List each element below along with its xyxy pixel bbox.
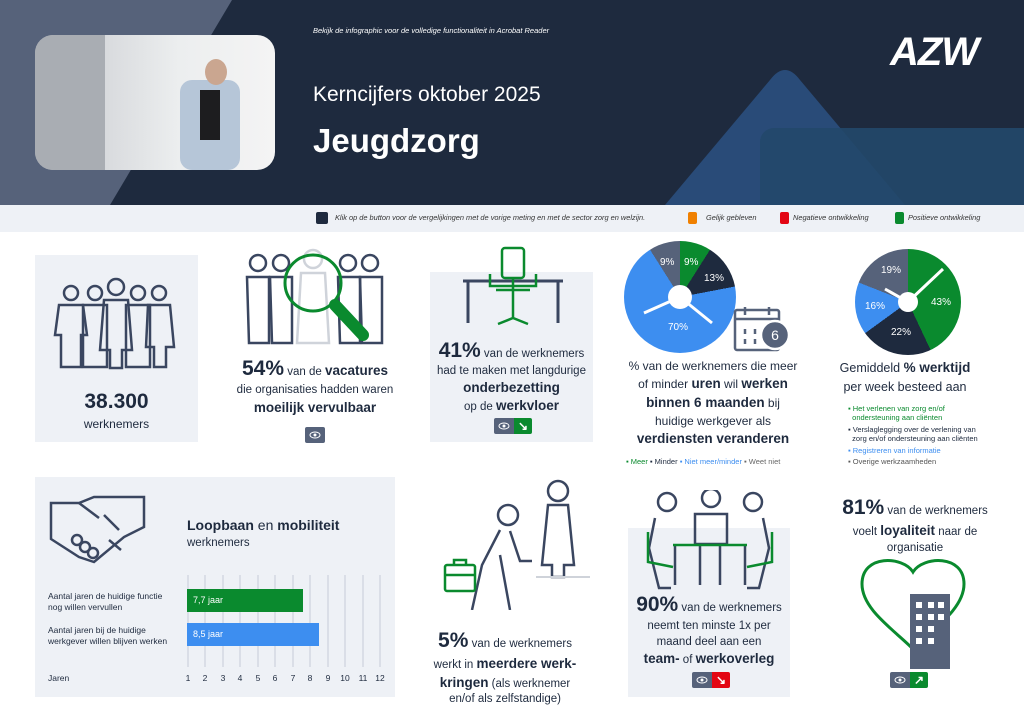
panel: onderbezetting: [430, 272, 593, 442]
text: 90%: maand deel aan een: [657, 636, 761, 648]
legend bar: Negatieve ontwikkeling: [793, 213, 869, 222]
bar chart: 9: [326, 673, 330, 683]
icon: calendar 6: 6: [771, 327, 779, 343]
icon: meeting: [646, 490, 774, 590]
bar chart: werkgever willen blijven werken: [48, 636, 167, 646]
text: 90%: team- of werkoverleg: [644, 651, 774, 666]
logo: AZW: [890, 30, 978, 74]
stat: 38.300: [84, 390, 149, 431]
text: 5%: werkt in meerdere werk-: [434, 656, 576, 671]
legend bar: Gelijk gebleven: [706, 213, 757, 222]
legend: werktijd: ▪ Registreren van informatie: [848, 446, 941, 454]
button down green: ↘: [518, 419, 528, 433]
button down red: [692, 672, 730, 688]
bar chart: 4: [238, 673, 242, 683]
stat: 38.300: werknemers: [84, 417, 149, 431]
text: uren: verdiensten veranderen: [637, 431, 789, 446]
chart: pie werktijd: [855, 249, 961, 355]
panel: loopbaan: [35, 477, 395, 697]
icon: handshake: [50, 496, 146, 564]
chart: pie werktijd: 43%: [931, 297, 951, 308]
panel: vacatures: [237, 248, 393, 443]
legend: werktijd: ▪ Overige werkzaamheden: [848, 457, 936, 466]
bar chart: 11: [359, 673, 367, 683]
button down green: [494, 418, 532, 434]
photo: [35, 35, 275, 170]
text: 90%: [636, 593, 782, 666]
icon: calendar 6: [734, 307, 788, 352]
text: 41%: [437, 339, 586, 413]
text: 5%: en/of als zelfstandige): [449, 693, 561, 705]
bar chart: Aantal jaren bij de huidige: [48, 625, 146, 635]
text: uren: % van de werknemers die meer: [629, 359, 797, 373]
panel: loyaliteit: [842, 496, 988, 688]
bar chart: nog willen vervullen: [48, 602, 122, 612]
eye button: [305, 427, 325, 443]
bar chart: 8,5 jaar: [193, 629, 223, 639]
text: 81%: voelt loyaliteit naar de: [853, 523, 977, 538]
text: 54%: moeilijk vervulbaar: [254, 400, 376, 415]
panel: loopbaan: werknemers: [187, 537, 250, 549]
title: Jeugdzorg: [313, 122, 480, 159]
bar chart: 2: [203, 673, 207, 683]
text: uren: huidige werkgever als: [655, 414, 771, 428]
button up green: ↗: [914, 673, 924, 687]
text: 5%: [434, 629, 576, 705]
legend: werktijd: [848, 404, 978, 466]
legend: eye button: [316, 212, 328, 224]
panel: meerdere werkkringen: [434, 480, 590, 705]
legend bar: [0, 205, 1024, 232]
text: 54%: 54% van de vacatures: [242, 357, 388, 380]
chart: pie werktijd: 16%: [865, 301, 885, 312]
icon: people with magnifier: [246, 248, 384, 344]
text: 41%: onderbezetting: [463, 380, 560, 395]
stat: 38.300: 38.300: [84, 390, 149, 413]
text: 81%: organisatie: [887, 542, 943, 554]
icon: people group: [54, 278, 176, 370]
button down red: ↘: [716, 673, 726, 687]
legend: werktijd: zorg en/of ondersteuning aan cliënten: [852, 434, 978, 443]
text: 54%: [237, 357, 393, 415]
heading: Loopbaan en mobiliteit: [187, 517, 339, 533]
chart: pie uren: 9%: [684, 257, 698, 268]
bar chart: 7,7 jaar: [193, 595, 223, 605]
legend: werktijd: ▪ Het verlenen van zorg en/of: [848, 404, 945, 413]
legend: werktijd: ondersteuning aan cliënten: [852, 413, 942, 422]
text: werktijd: Gemiddeld % werktijd: [840, 360, 970, 375]
bar chart: [48, 575, 385, 683]
text: 41%: op de werkvloer: [464, 398, 559, 413]
chart: pie uren: 70%: [668, 322, 688, 333]
bar chart: Jaren: [48, 673, 69, 683]
bar chart: 8: [308, 673, 312, 683]
chart: pie uren: 13%: [704, 273, 724, 284]
header background: [0, 0, 1024, 205]
bar chart: Aantal jaren de huidige functie: [48, 591, 162, 601]
text: 54%: die organisaties hadden waren: [237, 384, 393, 396]
chart: pie uren: [624, 241, 736, 353]
text: werktijd: per week besteed aan: [843, 380, 966, 394]
bar chart: 7: [291, 673, 295, 683]
text: 41%: 41% van de werknemers: [439, 339, 584, 362]
text: uren: of minder uren wil werken: [638, 376, 788, 391]
chart: pie werktijd: 22%: [891, 327, 911, 338]
legend bar: Positieve ontwikkeling: [908, 213, 980, 222]
legend: werktijd: ▪ Verslaglegging over de verlening van: [848, 425, 976, 434]
bar chart: 3: [221, 673, 225, 683]
text: 5%: kringen (als werknemer: [440, 675, 570, 690]
text: 90%: 90% van de werknemers: [636, 593, 782, 616]
text: 90%: neemt ten minste 1x per: [647, 620, 771, 632]
icon: desk chair: [463, 246, 563, 326]
bar chart: 12: [375, 673, 385, 683]
text: uren: binnen 6 maanden bij: [646, 395, 780, 410]
text: 81%: [842, 496, 988, 554]
panel: teamoverleg: [628, 528, 790, 697]
icon: heart with building: [860, 559, 966, 669]
chart: pie uren: 9%: [660, 257, 674, 268]
text: 81%: 81% van de werknemers: [842, 496, 988, 519]
bar chart: 5: [256, 673, 260, 683]
text: 5%: 5% van de werknemers: [438, 629, 572, 652]
legend: pie 1: ▪ Meer ▪ Minder ▪ Niet meer/minder ▪ Weet niet: [626, 457, 780, 466]
header note: Bekijk de infographic voor de volledige functionaliteit in Acrobat Reader: [313, 26, 549, 35]
panel: werknemers: [35, 255, 198, 442]
icon: walking people: [444, 480, 590, 610]
text: 41%: had te maken met langdurige: [437, 365, 586, 377]
button up green: [890, 672, 928, 688]
subtitle: Kerncijfers oktober 2025: [313, 83, 541, 106]
bar chart: 6: [273, 673, 277, 683]
bar chart: 1: [186, 673, 190, 683]
text: uren: [629, 359, 798, 446]
legend bar: Klik op de button voor de vergelijkingen met de vorige meting en met de sector zorg en welzijn.: [335, 213, 645, 222]
chart: pie werktijd: 19%: [881, 265, 901, 276]
text: werktijd: [840, 360, 970, 394]
bar chart: 10: [340, 673, 350, 683]
